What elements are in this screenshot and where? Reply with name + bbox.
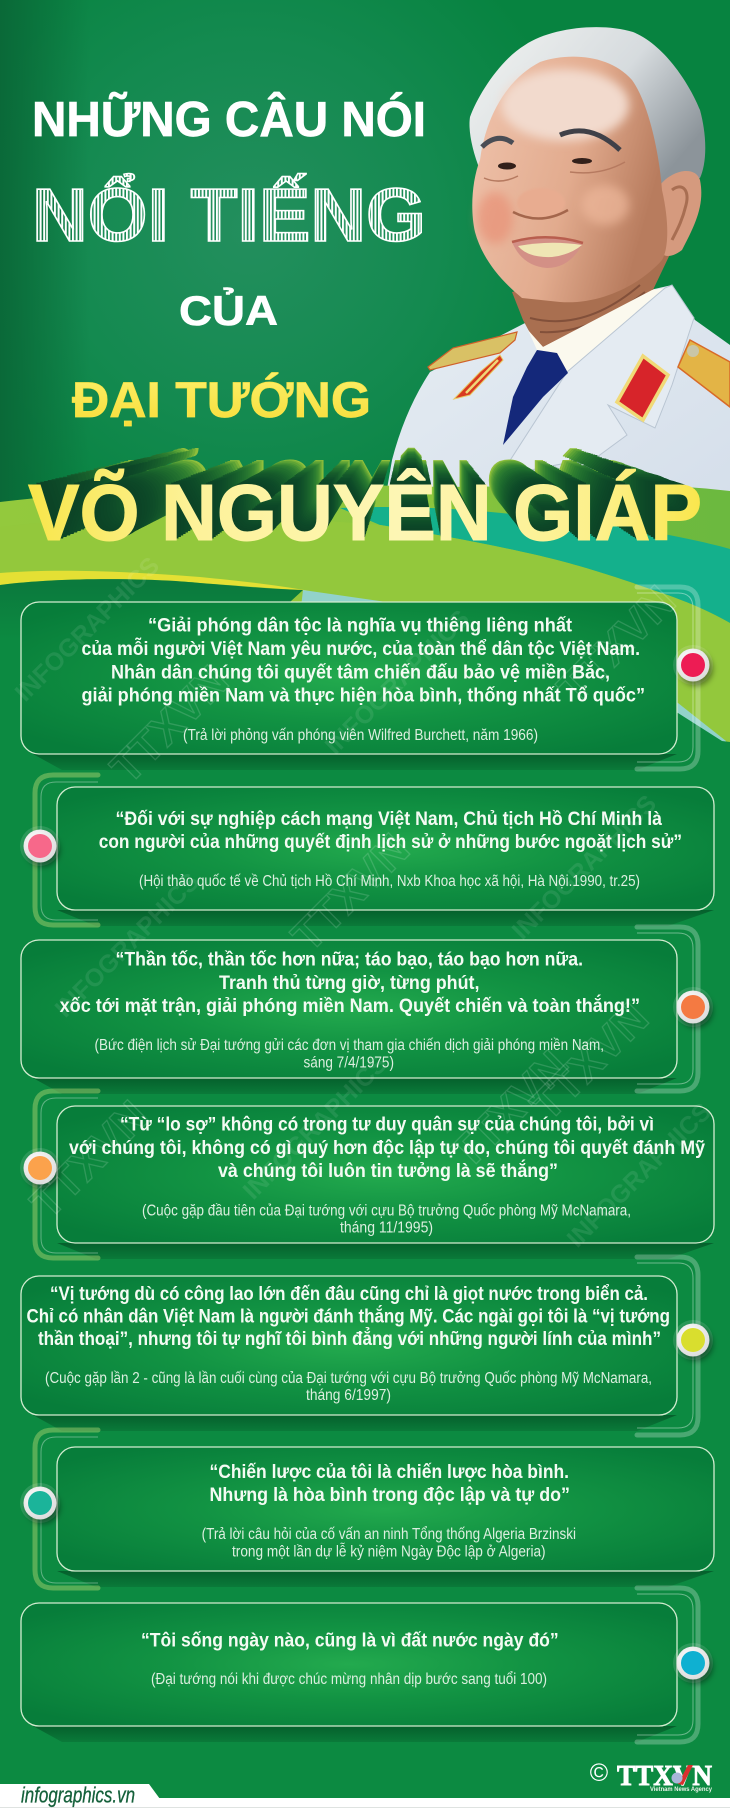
title name with 3D extrusion: VÕ NGUYÊN GIÁP (108, 451, 641, 522)
agency tagline: Vietnam News Agency (650, 1787, 713, 1793)
quote 6 text: Nhưng là hòa bình trong độc lập và tự do” (210, 1484, 570, 1506)
website label: infographics.vn (21, 1782, 135, 1808)
title name with 3D extrusion: VÕ NGUYÊN GIÁP (62, 462, 676, 543)
watermarks: TTXVN (548, 576, 685, 713)
title name with 3D extrusion: VÕ NGUYÊN GIÁP (112, 450, 638, 521)
title name with 3D extrusion: VÕ NGUYÊN GIÁP (74, 458, 667, 537)
hair (469, 27, 705, 195)
jacket (380, 285, 730, 530)
quote 2 text: “Đối với sự nghiệp cách mạng Việt Nam, Chủ tịch Hồ Chí Minh là (116, 808, 663, 830)
node: quote 7 marker (673, 1643, 713, 1684)
watermarks: INFOGRAPHICS (562, 1098, 717, 1253)
title name with 3D extrusion: VÕ NGUYÊN GIÁP (47, 463, 687, 549)
teal wave (340, 507, 730, 623)
quote 5 source: tháng 6/1997) (306, 1387, 391, 1404)
red V accent and globe mark (672, 1765, 693, 1785)
quote 6 text (210, 1461, 570, 1506)
quote 2 text (99, 808, 682, 853)
necktie (503, 350, 568, 445)
background waves (0, 485, 730, 800)
panel: quote 7 (21, 1588, 698, 1742)
logo: TTXVN (590, 1759, 713, 1793)
portrait: General Võ Nguyên Giáp (380, 27, 730, 530)
footer tab (0, 1784, 160, 1799)
ear (660, 171, 701, 256)
yellow stripe (0, 571, 310, 591)
panel: quote 3 (21, 927, 698, 1094)
quote 6 text: “Chiến lược của tôi là chiến lược hòa bình. (210, 1461, 569, 1483)
shirt collar (528, 288, 665, 372)
quote 1 text: Nhân dân chúng tôi quyết tâm chiến đấu bảo vệ miền Bắc, (111, 659, 610, 683)
right epaulette (678, 340, 730, 407)
panel: quote 4 (35, 1091, 714, 1259)
right collar tab (617, 356, 668, 420)
jacket collar and lapel (500, 285, 694, 476)
watermarks: TTXVN (21, 1091, 158, 1228)
title name with 3D extrusion: VÕ NGUYÊN GIÁP (70, 459, 670, 539)
node: quote 3 marker (673, 987, 713, 1028)
quote 6 source: (Trả lời câu hỏi của cố vấn an ninh Tổng thống Algeria Brzinski (202, 1526, 576, 1543)
quote 5 source: (Cuộc gặp lần 2 - cũng là lần cuối cùng của Đại tướng với cựu Bộ trưởng Quốc phòng Mỹ McNamara, (45, 1370, 652, 1387)
title name with 3D extrusion: VÕ NGUYÊN GIÁP (66, 460, 673, 541)
quote 4 source (142, 1203, 631, 1237)
copyright mark: © (590, 1759, 609, 1787)
light green wave (0, 485, 730, 780)
watermarks: INFOGRAPHICS (50, 868, 205, 1023)
neck (512, 250, 672, 347)
title name with 3D extrusion: VÕ NGUYÊN GIÁP (128, 447, 626, 514)
lower light green wave (0, 517, 730, 780)
watermarks: TTXVN (441, 1041, 578, 1178)
title name with 3D extrusion: VÕ NGUYÊN GIÁP (51, 462, 685, 547)
watermarks: INFOGRAPHICS (10, 552, 165, 707)
title line 1: NHỮNG CÂU NÓI (32, 92, 426, 147)
title name with 3D extrusion: VÕ NGUYÊN GIÁP (85, 455, 658, 532)
panel: quote 2 (35, 775, 714, 926)
quote 3 text (60, 949, 640, 1017)
node: quote 6 marker (20, 1483, 60, 1524)
watermarks: TTXVN (282, 824, 419, 961)
quote 4 text (69, 1114, 705, 1182)
quote 5 text: “Vị tướng dù có công lao lớn đến đâu cũng chỉ là giọt nước trong biển cả. (50, 1283, 648, 1305)
title name with 3D extrusion: VÕ NGUYÊN GIÁP (101, 452, 647, 525)
quote 3 text: xốc tới mặt trận, giải phóng miền Nam. Quyết chiến và toàn thắng!” (60, 993, 640, 1017)
agency wordmark: TTXVN (617, 1760, 712, 1792)
node: quote 5 marker (673, 1320, 713, 1361)
title name with 3D extrusion: VÕ NGUYÊN GIÁP (82, 457, 661, 534)
node: quote 1 marker (673, 645, 713, 686)
eyebrows (482, 138, 513, 147)
quote 3 source: sáng 7/4/1975) (304, 1055, 394, 1072)
title name with 3D extrusion: VÕ NGUYÊN GIÁP (59, 461, 679, 544)
watermarks: INFOGRAPHICS (320, 605, 475, 760)
quote 6 source (202, 1526, 576, 1561)
title name with 3D extrusion: VÕ NGUYÊN GIÁP (28, 468, 702, 557)
quote 2 source: (Hội thảo quốc tế về Chủ tịch Hồ Chí Minh, Nxb Khoa học xã hội, Hà Nội.1990, tr.25) (139, 873, 640, 890)
face (472, 57, 667, 302)
title line 4: ĐẠI TƯỚNG (72, 372, 371, 428)
left collar tab (454, 355, 503, 399)
title name with 3D extrusion: VÕ NGUYÊN GIÁP (32, 466, 699, 555)
footer strip (0, 1782, 730, 1808)
dark green cover below waves (0, 579, 730, 800)
title name with 3D extrusion: VÕ NGUYÊN GIÁP (89, 456, 655, 531)
quote 5 source (45, 1370, 652, 1404)
quote 3 text: Tranh thủ từng giờ, từng phút, (219, 972, 480, 994)
forehead highlight (501, 69, 629, 141)
node: quote 2 marker (20, 826, 60, 867)
title name with 3D extrusion: VÕ NGUYÊN GIÁP (93, 454, 653, 530)
title name with 3D extrusion: VÕ NGUYÊN GIÁP (97, 454, 650, 527)
quote 1 source: (Trả lời phỏng vấn phóng viên Wilfred Burchett, năm 1966) (183, 727, 538, 744)
title line 3: CỦA (179, 286, 278, 334)
quote 7 text: “Tôi sống ngày nào, cũng là vì đất nước ngày đó” (141, 1630, 559, 1652)
quote 3 text: “Thần tốc, thần tốc hơn nữa; táo bạo, táo bạo hơn nữa. (116, 949, 583, 971)
title name with 3D extrusion: VÕ NGUYÊN GIÁP (36, 466, 696, 554)
watermarks: INFOGRAPHICS (238, 1050, 393, 1205)
nose (517, 188, 565, 218)
watermarks: TTXVN (101, 656, 238, 793)
panel: quote 5 (21, 1257, 698, 1435)
eyes (484, 158, 625, 181)
title name with 3D extrusion: VÕ NGUYÊN GIÁP (39, 465, 693, 552)
watermarks: INFOGRAPHICS (507, 790, 662, 945)
title name with 3D extrusion: VÕ NGUYÊN GIÁP (124, 448, 629, 516)
quote 4 text: và chúng tôi luôn tin tưởng là sẽ thắng” (218, 1158, 558, 1182)
quote 1 text: giải phóng miền Nam và thực hiện hòa bình, thống nhất Tổ quốc” (82, 685, 645, 707)
quote 4 text: “Từ “lo sợ” không có trong tư duy quân sự của chúng tôi, bởi vì (120, 1114, 654, 1136)
quote 4 source: (Cuộc gặp đầu tiên của Đại tướng với cựu Bộ trưởng Quốc phòng Mỹ McNamara, (142, 1203, 631, 1220)
title line 2: striped lettering: NỔI TIẾNG (32, 173, 426, 257)
quote 7 source: (Đại tướng nói khi được chúc mừng nhân dịp bước sang tuổi 100) (151, 1671, 547, 1688)
quote 5 text (26, 1283, 670, 1350)
node: quote 4 marker (20, 1148, 60, 1189)
title block (28, 92, 702, 557)
quote 4 source: tháng 11/1995) (340, 1220, 433, 1237)
title name with 3D extrusion: VÕ NGUYÊN GIÁP (43, 465, 690, 551)
panel: quote 1 (21, 587, 698, 770)
watermarks: TTXVN (521, 993, 658, 1130)
quote 1 text (82, 615, 645, 707)
quote 1 text: của mỗi người Việt Nam yêu nước, của toàn thể dân tộc Việt Nam. (82, 636, 640, 660)
quote 1 text: “Giải phóng dân tộc là nghĩa vụ thiêng liêng nhất (148, 615, 572, 637)
mouth (512, 237, 583, 268)
quote 6 source: trong một lần dự lễ kỷ niệm Ngày Độc lập ở Algeria) (232, 1544, 546, 1561)
left epaulette (428, 332, 517, 370)
panel: quote 6 (35, 1430, 714, 1588)
title name with 3D extrusion: VÕ NGUYÊN GIÁP (55, 463, 682, 546)
title name with 3D extrusion: VÕ NGUYÊN GIÁP (120, 449, 632, 517)
watermarks (10, 552, 717, 1253)
title name with 3D extrusion: VÕ NGUYÊN GIÁP (105, 451, 644, 524)
quote 3 source: (Bức điện lịch sử Đại tướng gửi các đơn vị tham gia chiến dịch giải phóng miền Nam, (94, 1037, 604, 1054)
pale cyan stripe (280, 590, 726, 790)
cheeks (477, 192, 513, 244)
title name with 3D extrusion: VÕ NGUYÊN GIÁP (78, 456, 664, 535)
title name with 3D extrusion: VÕ NGUYÊN GIÁP (116, 450, 635, 519)
quote 3 source (94, 1037, 604, 1072)
